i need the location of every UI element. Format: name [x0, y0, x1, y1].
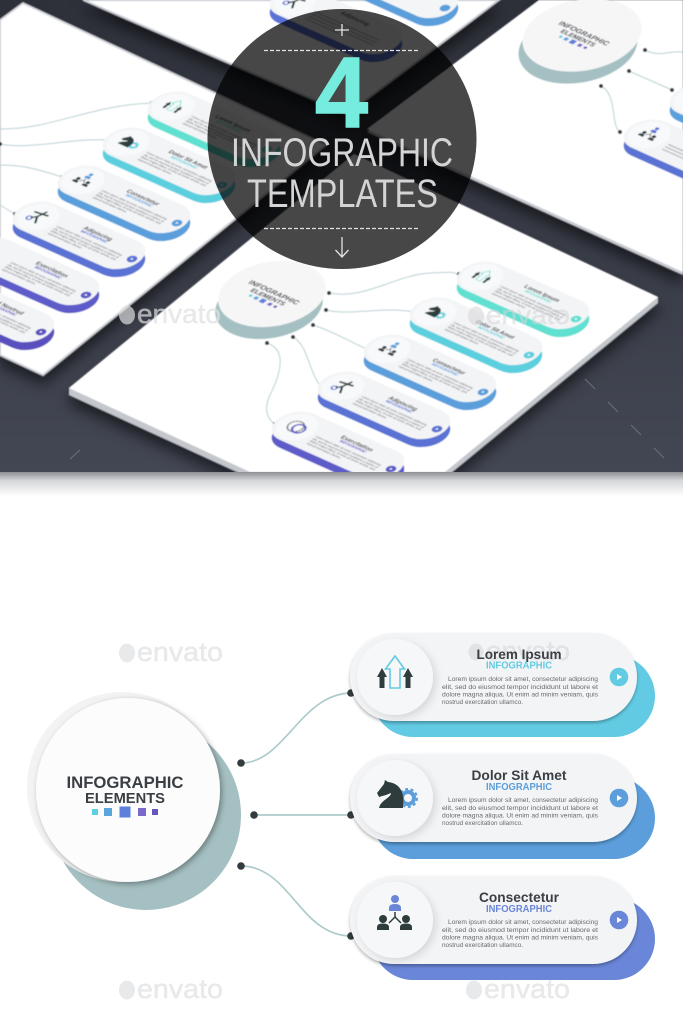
badge: dark translucent circle	[208, 9, 476, 269]
iso card: main sheet 1: elit, sed do eiusmod tempor incididunt ut labore et	[496, 287, 564, 319]
color squares	[92, 806, 158, 818]
iso card: left sheet 4: elit, sed do eiusmod tempor incididunt ut labore et	[52, 227, 120, 259]
card body text: Lorem ipsum dolor sit amet, consectetur adipiscing	[448, 919, 598, 926]
watermark: photo right: envato	[486, 300, 570, 330]
iso card: left sheet 4	[12, 202, 146, 278]
iso card: main sheet 2: INFOGRAPHIC	[476, 325, 506, 340]
card body text: dolore magna aliqua. Ut enim ad minim veniam, quis	[442, 692, 599, 698]
panel: card Dolor Sit Amet	[350, 754, 655, 859]
iso card: main sheet 5: dolore magna aliqua. Ut enim ad minim veniam, quis	[308, 439, 377, 471]
iso card: left sheet 4: Adipiscing	[81, 225, 115, 242]
iso card: main sheet 1: nostrud exercitation ullamco.	[490, 292, 527, 309]
connector dots: mockup sheets	[0, 48, 674, 426]
watermark: top left: envato	[137, 637, 223, 667]
iso card: left sheet 2: nostrud exercitation ullamco.	[136, 158, 173, 175]
iso card: left sheet 2	[102, 128, 236, 204]
iso card: main sheet 3: dolore magna aliqua. Ut enim ad minim veniam, quis	[400, 362, 469, 394]
iso card: top sheet indigo	[269, 0, 402, 62]
iso card: left sheet 4: dolore magna aliqua. Ut enim ad minim veniam, quis	[49, 229, 118, 261]
card title: Consectetur	[479, 890, 560, 905]
card body text: elit, sed do eiusmod tempor incididunt ut labore et	[442, 805, 598, 812]
card subtitle: INFOGRAPHIC	[486, 904, 552, 915]
iso card: main sheet 4: elit, sed do eiusmod tempor incididunt ut labore et	[357, 397, 425, 429]
card body text: nostrud exercitation ullamco.	[442, 942, 523, 949]
arrow down	[336, 237, 348, 257]
card body text: Lorem ipsum dolor sit amet, consectetur adipiscing	[448, 676, 598, 683]
play button	[610, 668, 628, 686]
iso card: top right sheet 2	[623, 120, 683, 179]
card face	[350, 876, 637, 964]
card body text: elit, sed do eiusmod tempor incididunt ut labore et	[442, 927, 598, 934]
iso card: main sheet 3	[363, 335, 497, 411]
iso card: left sheet 2: dolore magna aliqua. Ut enim ad minim veniam, quis	[139, 155, 208, 187]
play button	[610, 789, 628, 807]
iso card: main sheet 5	[271, 412, 405, 472]
iso card: main sheet 2: Lorem ipsum dolor sit amet, consectetur adipiscing	[452, 321, 521, 353]
iso card: left sheet 3: INFOGRAPHIC	[124, 193, 154, 208]
iso card: left sheet 5: Exercitation	[33, 261, 70, 279]
iso card: left sheet 1: Lorem ipsum dolor sit amet, consectetur adipiscing	[190, 115, 259, 147]
iso card: left sheet 5: INFOGRAPHIC	[33, 265, 63, 280]
iso card: main sheet 1	[456, 262, 590, 338]
iso ellipse: main sheet	[214, 262, 325, 340]
icon: people hierarchy	[377, 895, 412, 930]
card title: Lorem Ipsum	[476, 647, 562, 662]
iso card: main sheet 4: nostrud exercitation ullamco.	[351, 402, 388, 419]
iso ellipse: top right: INFOGRAPHIC	[556, 20, 613, 47]
panel: perspective mockup photo	[0, 0, 683, 493]
iso card: main sheet 3: INFOGRAPHIC	[430, 362, 460, 377]
iso card: top right sheet 1	[669, 87, 683, 124]
iso ellipse: main sheet: ELEMENTS	[248, 288, 287, 307]
iso card: main sheet 2: Dolor Sit Amet	[473, 319, 516, 340]
iso card: left sheet 1: elit, sed do eiusmod tempor incididunt ut labore et	[187, 117, 255, 149]
circle title: INFOGRAPHIC	[66, 774, 184, 792]
panel: card Lorem Ipsum	[350, 633, 655, 737]
iso card: main sheet 3: elit, sed do eiusmod tempor incididunt ut labore et	[403, 360, 471, 392]
icon: chess knight and gear	[377, 780, 417, 808]
card base	[372, 655, 655, 737]
card title: Dolor Sit Amet	[472, 768, 567, 783]
iso card: left sheet 1: INFOGRAPHIC	[214, 119, 244, 134]
iso card: main sheet 4: Lorem ipsum dolor sit amet, consectetur adipiscing	[360, 395, 429, 427]
iso card: top sheet indigo: Adipiscing	[338, 10, 372, 27]
icon: arrows up	[377, 656, 413, 688]
iso card: main sheet 4: INFOGRAPHIC	[384, 399, 414, 414]
photo drop shadow	[0, 472, 683, 496]
iso card: left sheet 2: Lorem ipsum dolor sit amet, consectetur adipiscing	[145, 151, 214, 183]
iso card: top sheet blue	[362, 0, 459, 27]
card body text: nostrud exercitation ullamco.	[442, 820, 523, 827]
icon circle	[357, 639, 433, 715]
iso card: left sheet 5	[0, 238, 100, 314]
connector: to card three	[237, 862, 355, 940]
card body text: nostrud exercitation ullamco.	[442, 699, 523, 706]
iso card: main sheet 1: Lorem Ipsum	[522, 284, 562, 304]
card face	[350, 754, 637, 842]
iso card: main sheet 1: dolore magna aliqua. Ut enim ad minim veniam, quis	[493, 289, 562, 321]
iso card: left sheet 3: elit, sed do eiusmod tempor incididunt ut labore et	[97, 191, 165, 223]
card body text: Lorem ipsum dolor sit amet, consectetur adipiscing	[448, 797, 598, 804]
watermark: photo left	[119, 305, 220, 324]
iso card: left sheet 2: Dolor Sit Amet	[166, 149, 209, 170]
numeral four: 4	[315, 37, 368, 149]
circle outer ring	[27, 692, 217, 882]
watermark on card: envato	[486, 636, 570, 666]
iso card: left sheet 3: dolore magna aliqua. Ut enim ad minim veniam, quis	[94, 193, 163, 225]
card body text	[442, 919, 599, 949]
watermark: bottom right: envato	[484, 974, 570, 1004]
card face	[350, 633, 637, 721]
watermark: photo right	[468, 306, 569, 326]
card base	[372, 777, 655, 859]
iso card: main sheet 4: Adipiscing	[386, 395, 420, 412]
iso card: main sheet 3: nostrud exercitation ullamco.	[397, 365, 434, 382]
play button	[610, 911, 628, 929]
circle face	[36, 698, 220, 882]
iso card: left sheet 2: INFOGRAPHIC	[169, 155, 199, 170]
card subtitle: INFOGRAPHIC	[486, 660, 552, 672]
iso card: main sheet 3: Lorem ipsum dolor sit amet, consectetur adipiscing	[406, 358, 475, 390]
iso card: left sheet 1: Lorem Ipsum	[213, 114, 253, 134]
iso card: left sheet 3	[57, 166, 191, 242]
iso card: main sheet 5: elit, sed do eiusmod tempor incididunt ut labore et	[311, 437, 379, 469]
connector: to card one	[237, 689, 355, 767]
iso card: main sheet 5: INFOGRAPHIC	[338, 439, 368, 454]
iso card: left sheet 3: Consectetur	[124, 189, 162, 207]
iso card: main sheet 2: nostrud exercitation ullamco.	[443, 328, 480, 345]
iso card: left sheet 5: elit, sed do eiusmod tempor incididunt ut labore et	[6, 263, 74, 295]
circle subtitle: ELEMENTS	[85, 790, 165, 807]
iso card: left sheet 4: Lorem ipsum dolor sit amet, consectetur adipiscing	[55, 225, 124, 257]
iso card: left sheet 5: nostrud exercitation ullamco.	[0, 268, 37, 285]
iso card: main sheet 5: nostrud exercitation ullamco.	[305, 442, 342, 459]
sheet: main	[66, 203, 661, 472]
watermark: bottom left: envato	[137, 974, 223, 1004]
iso card: left sheet 1	[147, 92, 280, 168]
icon circle	[357, 760, 433, 836]
sheet: left	[0, 3, 326, 375]
iso card: left sheet 1: dolore magna aliqua. Ut enim ad minim veniam, quis	[184, 119, 253, 151]
card body text	[442, 676, 599, 706]
iso card: main sheet 2: elit, sed do eiusmod tempor incididunt ut labore et	[449, 323, 517, 355]
iso card: main sheet 1: INFOGRAPHIC	[523, 289, 553, 304]
iso card: left sheet 4: nostrud exercitation ullamco.	[46, 232, 83, 249]
connector: to card two	[250, 811, 355, 819]
connectors: mockup sheets	[0, 50, 683, 424]
iso card: main sheet 5: Lorem ipsum dolor sit amet, consectetur adipiscing	[314, 435, 383, 467]
card body text: elit, sed do eiusmod tempor incididunt ut labore et	[442, 684, 598, 691]
card subtitle: INFOGRAPHIC	[486, 782, 552, 793]
circle base	[51, 720, 241, 910]
heading: INFOGRAPHIC	[231, 131, 453, 175]
iso card: main sheet 2	[409, 298, 543, 374]
subheading: TEMPLATES	[247, 172, 438, 216]
iso card: main sheet 3: Consectetur	[430, 358, 468, 376]
dark ground	[0, 0, 683, 472]
iso card: left sheet 6	[0, 293, 55, 351]
iso card: left sheet 5: dolore magna aliqua. Ut enim ad minim veniam, quis	[3, 265, 72, 297]
plus sign	[335, 24, 349, 36]
iso card: main sheet 4: dolore magna aliqua. Ut enim ad minim veniam, quis	[354, 399, 423, 431]
iso ellipse: top right	[518, 0, 640, 84]
card base	[372, 898, 655, 980]
iso card: left sheet 2: elit, sed do eiusmod tempor incididunt ut labore et	[142, 153, 210, 185]
icon circle	[357, 882, 433, 958]
sheet: top right	[367, 0, 683, 275]
sheet: top middle	[83, 0, 499, 114]
iso ellipse: main sheet: INFOGRAPHIC	[246, 279, 303, 306]
iso card: left sheet 5: Lorem ipsum dolor sit amet, consectetur adipiscing	[9, 261, 78, 293]
iso card: main sheet 5: Exercitation	[338, 435, 375, 453]
iso card: left sheet 1: nostrud exercitation ullamco.	[181, 122, 218, 139]
card body text: dolore magna aliqua. Ut enim ad minim veniam, quis	[442, 812, 599, 820]
iso card: main sheet 1: Lorem ipsum dolor sit amet, consectetur adipiscing	[499, 285, 568, 317]
iso ellipse: top right: ELEMENTS	[558, 29, 597, 48]
iso card: left sheet 3: Lorem ipsum dolor sit amet, consectetur adipiscing	[100, 189, 169, 221]
iso card: main sheet 2: dolore magna aliqua. Ut enim ad minim veniam, quis	[446, 325, 515, 357]
card body text: dolore magna aliqua. Ut enim ad minim veniam, quis	[442, 934, 599, 942]
watermark: photo left: envato	[137, 299, 221, 329]
iso card: main sheet 4	[317, 372, 451, 448]
panel: card Consectetur	[350, 876, 655, 980]
dashed divider top	[264, 50, 420, 52]
dashed divider bottom	[264, 228, 420, 230]
iso card: left sheet 3: nostrud exercitation ullamco.	[91, 196, 128, 213]
central circle	[27, 692, 241, 910]
iso card: left sheet 4: INFOGRAPHIC	[79, 229, 109, 244]
card body text	[442, 797, 599, 827]
